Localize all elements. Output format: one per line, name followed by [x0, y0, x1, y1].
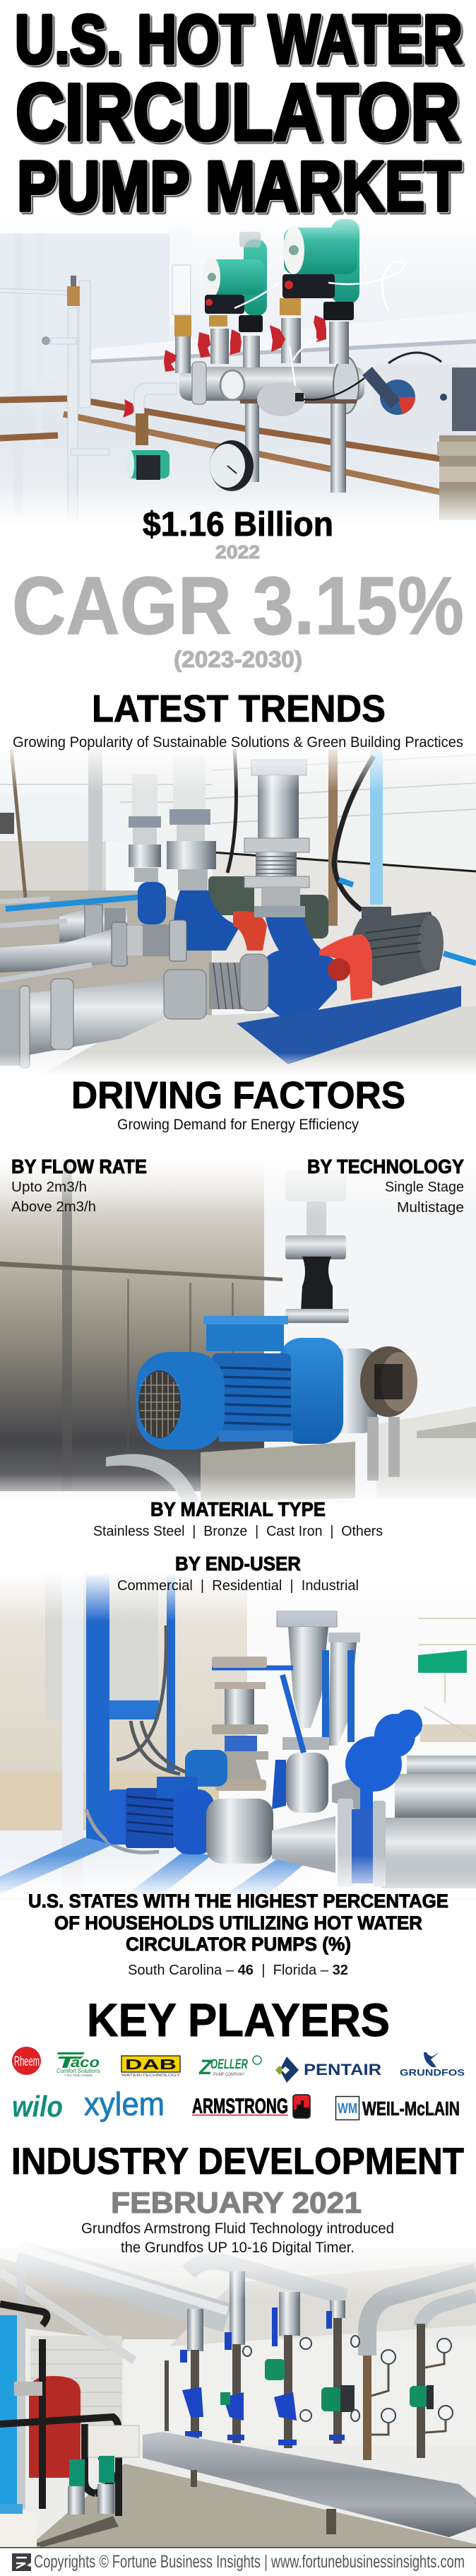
- logo: DAB: WATER•TECHNOLOGY: [121, 2074, 180, 2078]
- blue water pipes: [6, 880, 476, 963]
- filter unit: [14, 2382, 42, 2396]
- thermostat head: [257, 382, 305, 416]
- logo: Pentair: PENTAIR: [304, 2061, 381, 2078]
- small teal pump: [126, 450, 169, 480]
- center valve: [212, 1668, 329, 1813]
- logo: Taco: Comfort Solutions: [56, 2067, 101, 2074]
- segment: material type: BY MATERIAL TYPE: [150, 1498, 326, 1520]
- black pipes: [0, 2304, 119, 2516]
- red valve handles: [123, 315, 326, 418]
- motor flange: [279, 1338, 343, 1444]
- front red guard: [319, 934, 372, 1001]
- photo: boiler room with pipes and gauges: [0, 2237, 476, 2548]
- segment: end-user: BY END-USER: [175, 1553, 301, 1575]
- discharge pipe: rear: [59, 905, 127, 942]
- blue base frame: [237, 986, 461, 1064]
- garage door: [30, 2336, 122, 2435]
- barrel: [0, 2504, 37, 2548]
- duct legs: [191, 2470, 336, 2534]
- middle pump column: [167, 756, 240, 951]
- central column: [212, 1657, 268, 1791]
- heading: key players: KEY PLAYERS: [87, 1994, 390, 2046]
- segment: material type: Stainless Steel | Bronze | Cast Iron | Others: [93, 1524, 383, 1539]
- front motor: [106, 1777, 214, 1854]
- logo: Weil-McLain: WM: [338, 2101, 357, 2117]
- development text: the Grundfos UP 10-16 Digital Timer.: [121, 2240, 355, 2256]
- development date: FEBRUARY 2021: [111, 2186, 362, 2219]
- logo: Grundfos: GRUNDFOS: [400, 2067, 465, 2078]
- butterfly valve: [338, 1799, 386, 1887]
- middle red guard: [233, 911, 267, 951]
- small gauge: [220, 370, 244, 400]
- terminal box: [203, 1316, 288, 1351]
- blue handwheels: [345, 1710, 422, 1809]
- rear motors: [208, 876, 328, 939]
- logo: DAB: DAB: [125, 2057, 177, 2073]
- logo: Grundfos: [400, 2052, 465, 2078]
- motor fan cover: [136, 1352, 225, 1449]
- heading: U.S. states statistic: [28, 1890, 448, 1955]
- segment: technology: [307, 1155, 464, 1216]
- logo: Zoeller: OELLER: [210, 2057, 248, 2072]
- back pump column: [129, 774, 166, 924]
- valve stems: [175, 318, 349, 373]
- photo: pumps with blue handwheels: [0, 1572, 476, 1901]
- light blue pipe: [370, 749, 383, 905]
- logo: Rheem: [12, 2047, 41, 2075]
- brass fittings: [67, 276, 191, 445]
- development text: [81, 2221, 394, 2256]
- front volute: [258, 917, 337, 1018]
- pressure gauges: [63, 2336, 453, 2468]
- logo: Armstrong: ARMSTRONG: [192, 2095, 288, 2118]
- rear motor: [185, 1750, 227, 1787]
- rear steel pipes: [332, 1755, 476, 1818]
- trend text: Growing Popularity of Sustainable Solutions & Green Building Practices: [13, 734, 463, 751]
- photo: blue electric motor pump: [0, 1152, 476, 1519]
- actuator: [367, 353, 476, 431]
- segment: material type: [93, 1498, 383, 1539]
- logo: Rheem: Rheem: [14, 2054, 40, 2069]
- heading: U.S. states statistic: OF HOUSEHOLDS UTILIZING HOT WATER: [54, 1912, 422, 1934]
- front motor: [350, 907, 444, 986]
- logo: Taco: aco: [71, 2055, 100, 2071]
- white pvc pipes: [0, 265, 191, 524]
- forecast period: (2023-2030): [174, 647, 302, 672]
- base year: 2022: [215, 541, 260, 563]
- driving factor text: Growing Demand for Energy Efficiency: [117, 1117, 359, 1133]
- segment: flow rate: Above 2m3/h: [11, 1199, 96, 1215]
- right fittings: [437, 435, 476, 520]
- large steel pipe: [381, 1818, 476, 1888]
- big pressure gauge: [210, 440, 254, 491]
- lower pipe flange: [106, 1454, 199, 1505]
- segment: technology: BY TECHNOLOGY: [307, 1155, 464, 1177]
- front pump column: [244, 760, 309, 917]
- footer: [0, 2547, 476, 2576]
- discharge pipe: middle: [0, 920, 186, 972]
- development text: Grundfos Armstrong Fluid Technology introduced: [81, 2221, 394, 2237]
- logo: Taco: [56, 2052, 101, 2077]
- logo: Taco: A Taco Family Company: [64, 2074, 93, 2077]
- copper pipes: [0, 399, 446, 493]
- logo: Pentair: [275, 2057, 381, 2083]
- logo: wilo: wilo: [12, 2090, 63, 2123]
- blue valves: [180, 2307, 345, 2445]
- blue frame: [86, 1572, 175, 1845]
- reducer cone: [272, 1816, 335, 1873]
- radiator: [88, 2425, 139, 2457]
- dark pipes: [165, 2318, 425, 2458]
- right circulator pump: [282, 219, 359, 320]
- pump body: [206, 1799, 273, 1864]
- segment: technology: Single Stage: [385, 1180, 464, 1195]
- photo: circulator pumps and manifold: [0, 198, 476, 527]
- green circulators: [220, 2359, 434, 2412]
- logo: DAB: [121, 2056, 180, 2078]
- black hose: [334, 756, 374, 910]
- market size value: $1.16 Billion: [143, 506, 333, 543]
- manifold: [179, 367, 364, 401]
- blue tank: [0, 2315, 21, 2504]
- logo: xylem: xylem: [84, 2086, 165, 2122]
- grey cabinet: [45, 1572, 158, 1719]
- cables: [86, 1625, 191, 1852]
- icon: Fortune Business Insights logo: [12, 2553, 31, 2571]
- green multistage pumps: [34, 2456, 119, 2547]
- left circulator pump: [203, 232, 267, 332]
- back columns: [277, 1611, 360, 1749]
- heading: U.S. states statistic: U.S. STATES WITH THE HIGHEST PERCENTAGE: [28, 1890, 448, 1912]
- heading: U.S. states statistic: CIRCULATOR PUMPS (%): [126, 1934, 351, 1955]
- pump housing rear: [328, 1346, 417, 1433]
- title: [15, 1, 463, 226]
- legs: [367, 1417, 400, 1481]
- wires: [234, 261, 405, 396]
- state values: South Carolina – 46 | Florida – 32: [128, 1963, 348, 1978]
- metal rack: [17, 2269, 25, 2509]
- silver risers: [187, 2271, 345, 2351]
- segment: technology: Multistage: [397, 1200, 464, 1216]
- white column: [62, 1572, 83, 1890]
- segment: end-user: Commercial | Residential | Industrial: [117, 1578, 359, 1594]
- logo: Zoeller: [198, 2056, 261, 2079]
- discharge pipe: front: [0, 954, 268, 1068]
- logo: Zoeller: PUMP COMPANY: [213, 2073, 244, 2077]
- ceiling ducts: [0, 2247, 476, 2360]
- stainless header duct: [143, 2432, 476, 2537]
- motor finned body: [212, 1353, 291, 1434]
- upper flange and rubber joint: [285, 1170, 349, 1323]
- floor rails: [0, 1837, 311, 1894]
- segment: flow rate: Upto 2m3/h: [11, 1180, 87, 1195]
- gauge tubing: [371, 2353, 446, 2435]
- brown pole: [328, 749, 338, 926]
- valve handles: [0, 899, 92, 980]
- heading: latest trends: LATEST TRENDS: [92, 688, 386, 730]
- motor foot: [219, 1430, 293, 1442]
- red expansion tank: [29, 2376, 81, 2478]
- photo: blue centrifugal pumps: [0, 742, 476, 1076]
- heading: driving factors: DRIVING FACTORS: [71, 1074, 405, 1117]
- logo: Weil-McLain: [336, 2096, 460, 2120]
- green awning: [418, 1650, 467, 1673]
- floor: [28, 2464, 476, 2547]
- segment: end-user: [117, 1553, 359, 1594]
- steel base: [201, 1442, 355, 1502]
- segment: flow rate: [11, 1155, 147, 1215]
- logo: Zoeller: Z: [198, 2056, 213, 2079]
- segment: flow rate: BY FLOW RATE: [11, 1155, 147, 1177]
- building background: [418, 1618, 476, 1739]
